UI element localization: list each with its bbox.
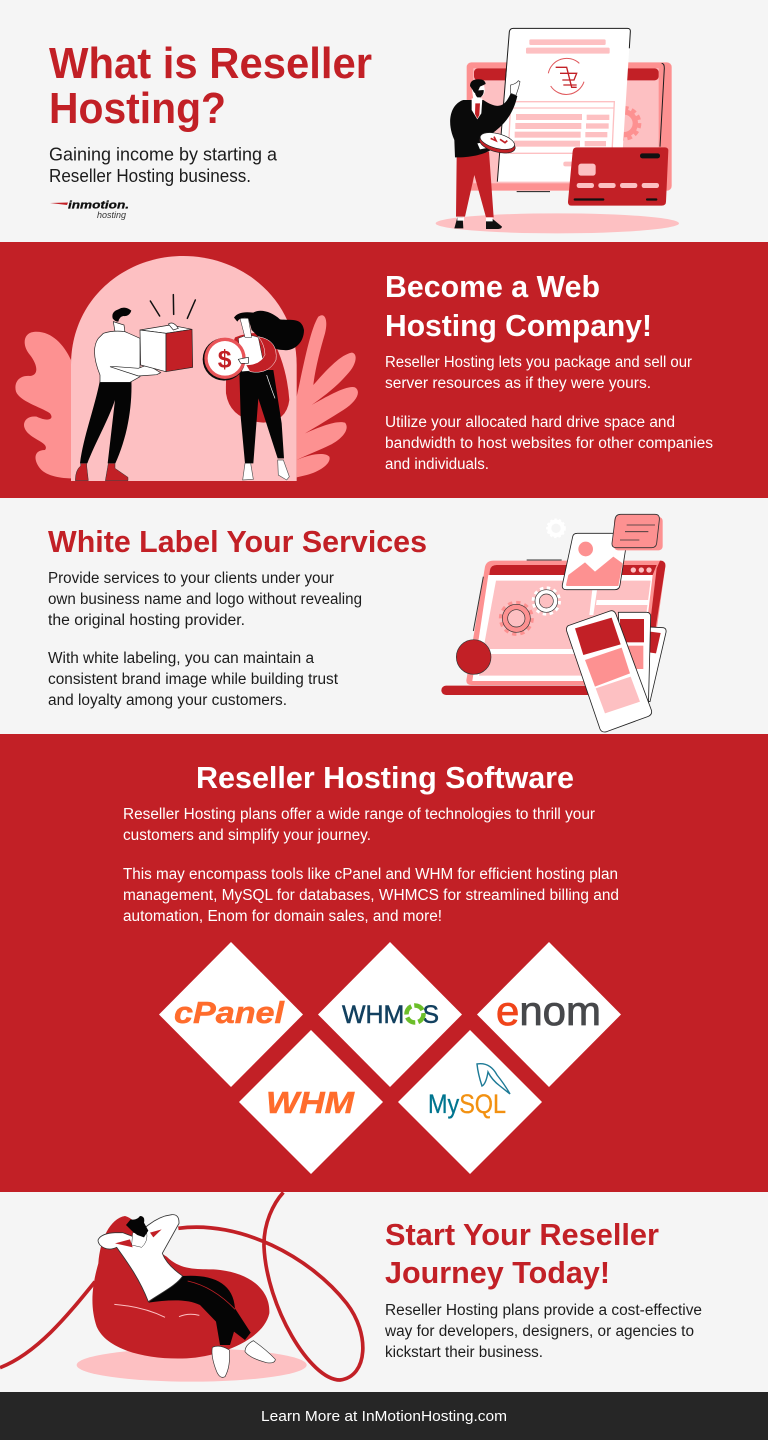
title: What is Reseller	[49, 39, 372, 88]
logo tile: MySQL: MySQL	[428, 1089, 506, 1119]
body text: Reseller Hosting lets you package and sell our	[385, 354, 692, 371]
heading: Start Your Reseller	[385, 1217, 659, 1252]
logo: InMotion Hosting: inmotion.	[68, 200, 129, 212]
note card	[612, 514, 663, 550]
footer bar: Learn More at InMotionHosting.com	[261, 1408, 507, 1425]
heading: Journey Today!	[385, 1255, 610, 1290]
body text	[385, 354, 713, 473]
credit card	[568, 147, 668, 206]
man	[450, 79, 520, 229]
woman with coin	[203, 311, 304, 480]
gears	[501, 588, 559, 634]
heading	[385, 1217, 659, 1290]
illustration: man with invoice and credit card	[436, 28, 679, 233]
man with box	[75, 295, 195, 481]
footer bar	[0, 1392, 768, 1440]
body text: Provide services to your clients under your	[48, 570, 334, 587]
woman with coin: $	[218, 346, 232, 373]
body text	[123, 806, 619, 925]
title: Hosting?	[49, 84, 226, 133]
panel: white label your services	[0, 498, 768, 734]
monitor	[467, 62, 672, 192]
panel: become a web hosting company	[0, 242, 768, 498]
body text: own business name and logo without revealing	[48, 591, 362, 608]
logo tile: MySQL	[398, 1030, 542, 1174]
leaves	[15, 315, 358, 478]
subtitle text: Gaining income by starting a	[49, 144, 278, 164]
heading	[385, 269, 652, 343]
heading: Become a Web	[385, 269, 600, 304]
illustration: laptop with gears and colour swatches	[441, 514, 666, 732]
logo tile: WHMCS: WHMCS	[342, 1001, 439, 1029]
subtitle text: Reseller Hosting business.	[49, 166, 251, 186]
title	[49, 39, 372, 133]
panel: start your reseller journey	[0, 1192, 768, 1392]
panel: intro	[0, 0, 768, 242]
body text: With white labeling, you can maintain a	[48, 650, 314, 667]
body text: way for developers, designers, or agencies to	[384, 1323, 694, 1340]
body text: Reseller Hosting plans offer a wide range of technologies to thrill your	[123, 806, 595, 823]
logo tile: WHMCS	[318, 942, 462, 1087]
body text	[384, 1302, 702, 1361]
laptop	[441, 560, 665, 695]
red dot	[456, 640, 491, 674]
invoice paper	[497, 28, 630, 182]
subtitle text	[49, 144, 278, 186]
panel: reseller hosting software	[0, 734, 768, 1192]
body text: the original hosting provider.	[48, 612, 245, 629]
logo tile: cPanel: cPanel	[174, 995, 286, 1030]
body text: Reseller Hosting plans provide a cost-effective	[385, 1302, 702, 1319]
body text: Utilize your allocated hard drive space and	[385, 414, 675, 431]
heading: White Label Your Services	[48, 524, 427, 559]
logo tile: WHM: WHM	[266, 1085, 355, 1120]
body text	[48, 570, 362, 709]
body text: This may encompass tools like cPanel and WHM for efficient hosting plan	[123, 866, 618, 883]
arch	[71, 256, 297, 481]
logo tile: WHM	[239, 1030, 383, 1174]
logo tile: enom	[477, 942, 621, 1087]
logo: InMotion Hosting: hosting	[97, 210, 126, 220]
body text: and individuals.	[385, 456, 489, 473]
heading: Hosting Company!	[385, 308, 652, 343]
looping line	[0, 1192, 363, 1380]
body text: kickstart their business.	[385, 1344, 543, 1361]
body text: and loyalty among your customers.	[48, 692, 287, 709]
body text: automation, Enom for domain sales, and more!	[123, 908, 442, 925]
body text: consistent brand image while building trust	[48, 671, 339, 688]
logo: InMotion Hosting	[50, 200, 129, 220]
body text: bandwidth to host websites for other companies	[385, 435, 713, 452]
logo tile: enom: enom	[496, 988, 601, 1034]
body text: server resources as if they were yours.	[385, 375, 651, 392]
bean bag	[92, 1216, 269, 1359]
heading: Reseller Hosting Software	[196, 760, 574, 795]
illustration: exchanging box for money	[15, 256, 358, 481]
body text: management, MySQL for databases, WHMCS for streamlined billing and	[123, 887, 619, 904]
logo tile: cPanel	[159, 942, 303, 1087]
man	[98, 1215, 275, 1377]
illustration: man relaxing on bean bag	[0, 1192, 363, 1382]
image card	[562, 533, 627, 590]
swatch cards	[567, 611, 666, 732]
body text: customers and simplify your journey.	[123, 827, 371, 844]
